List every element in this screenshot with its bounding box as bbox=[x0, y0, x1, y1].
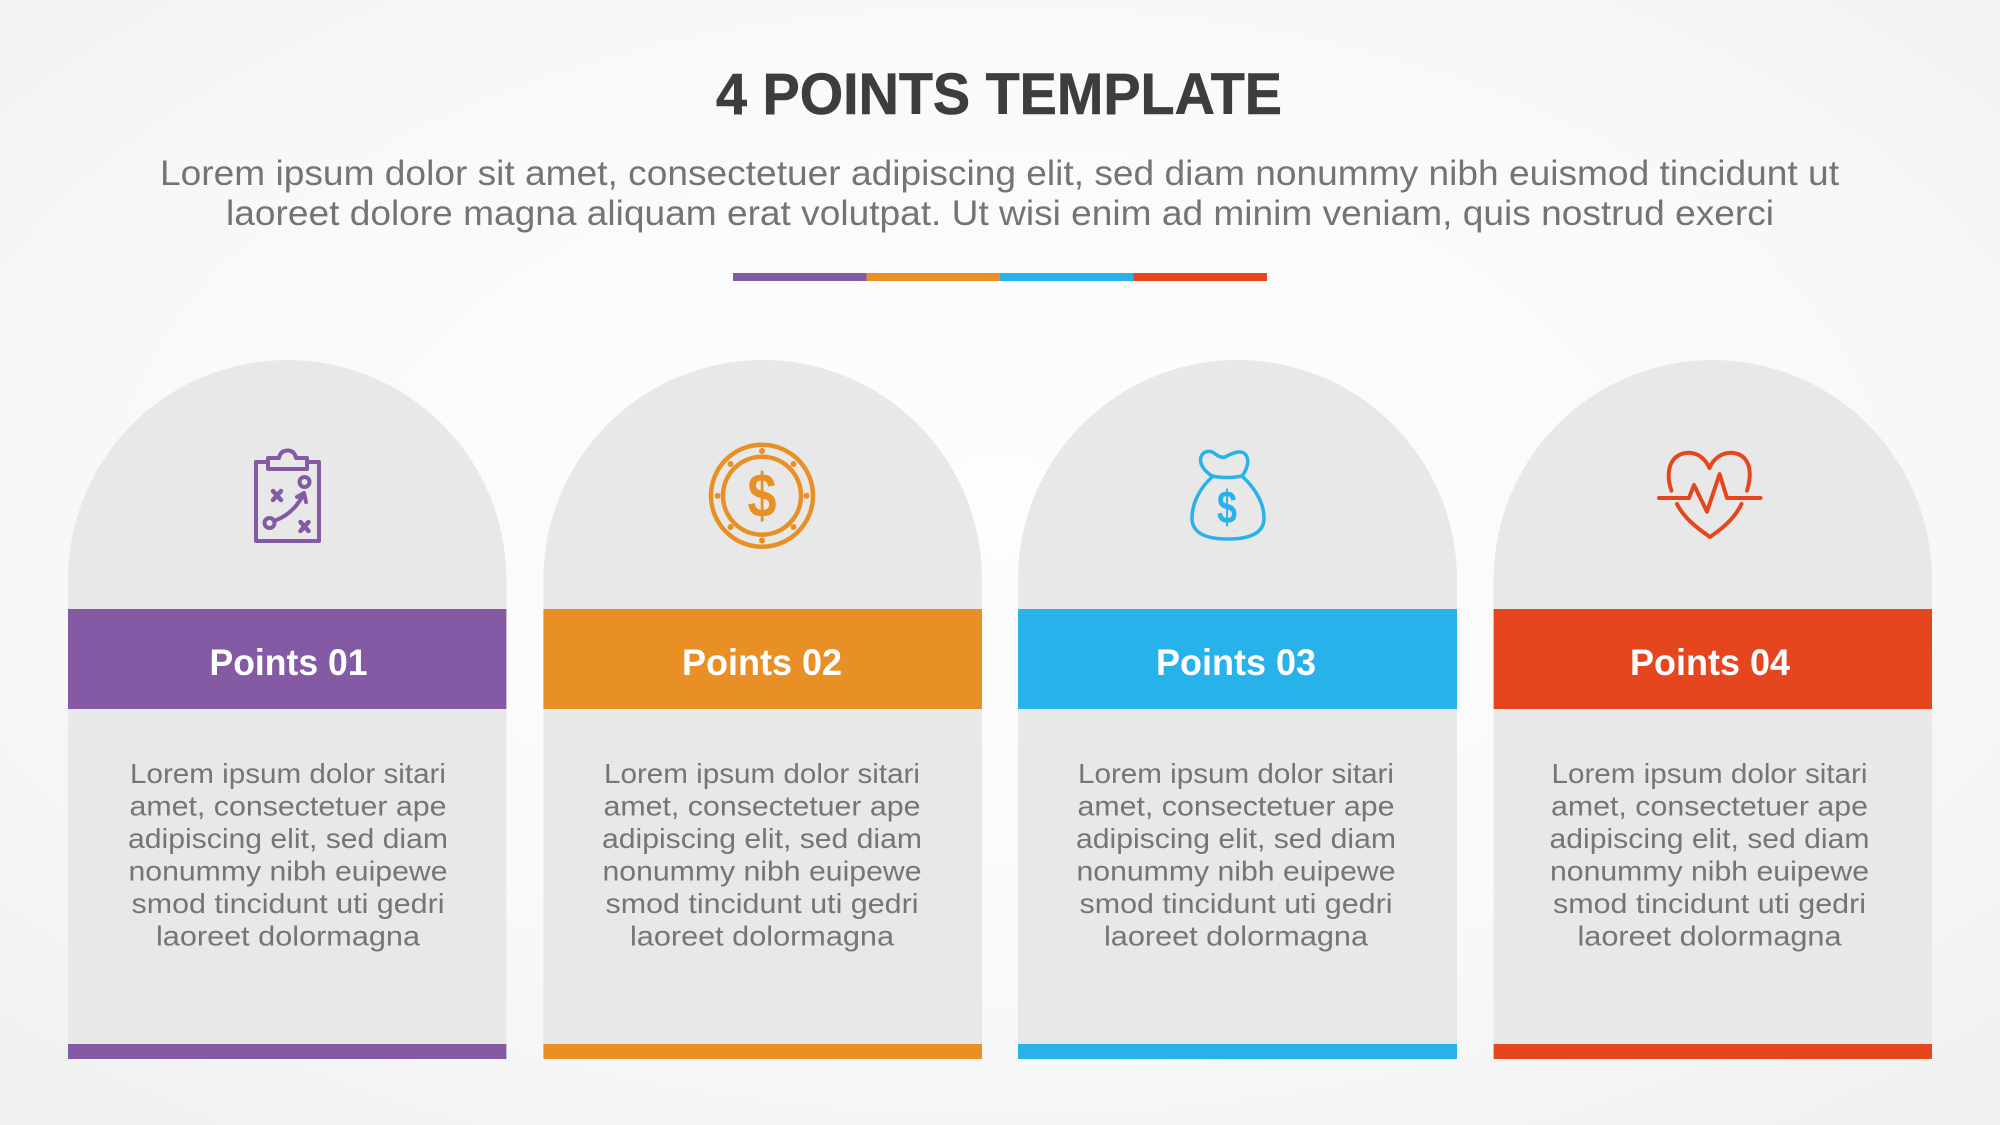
body text: points 01: nonummy nibh euipewe bbox=[128, 856, 447, 886]
body text: points 02: smod tincidunt uti gedri bbox=[606, 888, 918, 919]
band: points 02 bbox=[543, 609, 982, 709]
body text: points 03: adipiscing elit, sed diam bbox=[1076, 823, 1396, 854]
body text: points 01: adipiscing elit, sed diam bbox=[128, 823, 448, 854]
body text: points 04: Lorem ipsum dolor sitari bbox=[1552, 758, 1868, 789]
body text: points 01 bbox=[128, 758, 448, 952]
body text: points 04 bbox=[1550, 758, 1870, 952]
band: points 04 bbox=[1494, 609, 1932, 709]
title: 4 POINTS TEMPLATE bbox=[716, 62, 1282, 127]
body text: points 04: smod tincidunt uti gedri bbox=[1553, 888, 1866, 919]
icon: clipboard with play diagram bbox=[256, 450, 319, 541]
body text: points 04: adipiscing elit, sed diam bbox=[1550, 823, 1870, 854]
body text: points 02: adipiscing elit, sed diam bbox=[602, 823, 922, 854]
footer bar: points 02 bbox=[543, 1044, 982, 1059]
body text: points 01: Lorem ipsum dolor sitari bbox=[130, 758, 446, 789]
icon: dollar coin: $ bbox=[748, 462, 776, 531]
icon: heart with pulse bbox=[1659, 453, 1760, 537]
subtitle text block: laoreet dolore magna aliquam erat volutpat. Ut wisi enim ad minim veniam, quis nostrud exerci bbox=[226, 194, 1774, 233]
body text: points 04: amet, consectetuer ape bbox=[1551, 790, 1868, 822]
panel: points 01 bbox=[68, 360, 506, 1059]
body text: points 03: smod tincidunt uti gedri bbox=[1080, 888, 1392, 919]
band: points 01 bbox=[68, 609, 506, 709]
panel: points 03 bbox=[1018, 360, 1457, 1059]
body text: points 02: Lorem ipsum dolor sitari bbox=[604, 758, 920, 789]
four-colour divider bar bbox=[733, 273, 1267, 281]
body text: points 04: nonummy nibh euipewe bbox=[1550, 856, 1869, 886]
icon: money bag bbox=[1192, 451, 1264, 539]
footer bar: points 04 bbox=[1494, 1044, 1932, 1059]
footer bar: points 01 bbox=[68, 1044, 506, 1059]
label: points 01: Points 01 bbox=[210, 642, 368, 683]
body text: points 01: laoreet dolormagna bbox=[156, 920, 420, 952]
footer bar: points 03 bbox=[1018, 1044, 1457, 1059]
icon: money bag: $ bbox=[1217, 481, 1237, 533]
body text: points 02 bbox=[602, 758, 922, 952]
label: points 04: Points 04 bbox=[1630, 642, 1790, 683]
body text: points 03 bbox=[1076, 758, 1396, 952]
label: points 03: Points 03 bbox=[1156, 642, 1316, 683]
band: points 03 bbox=[1018, 609, 1457, 709]
body text: points 03: laoreet dolormagna bbox=[1104, 920, 1368, 952]
body text: points 02: nonummy nibh euipewe bbox=[602, 856, 922, 886]
body text: points 03: Lorem ipsum dolor sitari bbox=[1078, 758, 1394, 789]
panel: points 04 bbox=[1494, 360, 1932, 1059]
body text: points 01: smod tincidunt uti gedri bbox=[132, 888, 444, 919]
body text: points 02: laoreet dolormagna bbox=[630, 920, 894, 952]
body text: points 02: amet, consectetuer ape bbox=[604, 790, 920, 822]
body text: points 01: amet, consectetuer ape bbox=[130, 790, 446, 822]
body text: points 03: amet, consectetuer ape bbox=[1078, 790, 1394, 822]
label: points 02: Points 02 bbox=[682, 642, 842, 683]
body text: points 04: laoreet dolormagna bbox=[1578, 920, 1842, 952]
icon: dollar coin bbox=[711, 445, 813, 547]
body text: points 03: nonummy nibh euipewe bbox=[1076, 856, 1396, 886]
panel: points 02 bbox=[543, 360, 982, 1059]
subtitle text block bbox=[160, 154, 1839, 233]
subtitle text block: Lorem ipsum dolor sit amet, consectetuer adipiscing elit, sed diam nonummy nibh euismod tincidunt ut bbox=[160, 154, 1839, 193]
